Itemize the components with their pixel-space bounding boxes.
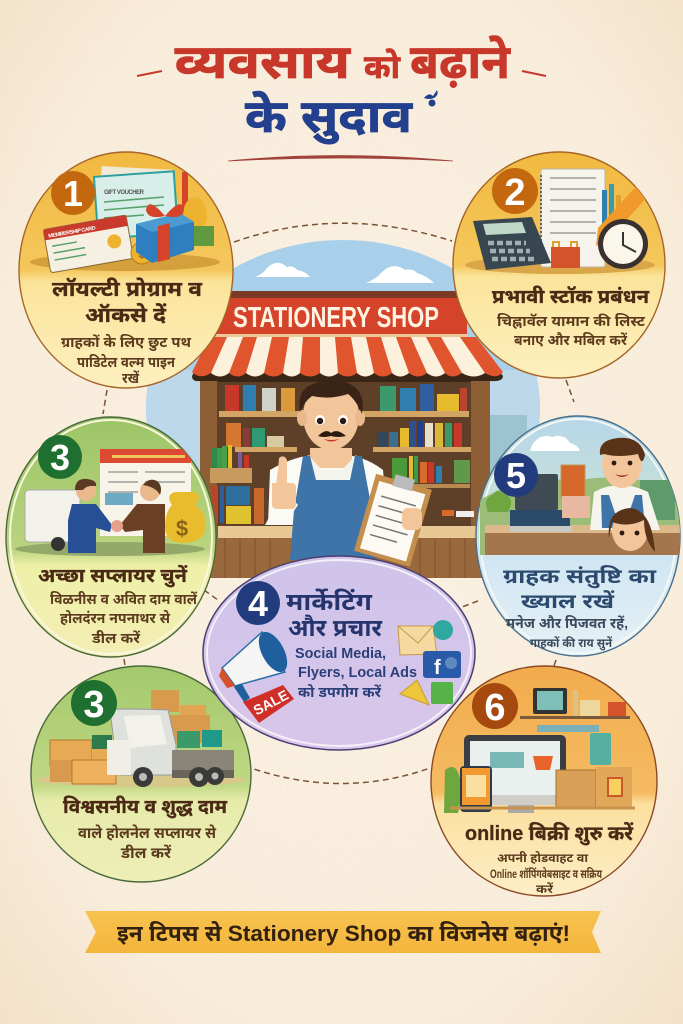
bottom banner [85,911,601,953]
heading: अच्छा सप्लायर चुनें [38,564,188,588]
heading: लॉयल्टी प्रोग्राम व [52,277,202,301]
body text: डील करें [120,844,172,862]
body text: वाले होलनेल सप्लायर से [78,824,217,842]
icon: sale tag [243,685,294,723]
shop sign [210,291,467,338]
badge 3: 3 [83,684,105,726]
counter [218,526,476,538]
illustration: voucher, card and gift: MEMBERSHIP CARD [48,225,96,240]
illustration: calculator, notebook, clock [465,169,655,274]
body text: अपनी होडवाहट वा [497,850,588,865]
heading: मार्केटिंग [286,588,373,616]
panel 3b: wholesale supplier [31,666,251,882]
awning [192,337,503,381]
badge 3: 3 [50,437,70,478]
heading: प्रभावी स्टॉक प्रबंधन [492,286,649,308]
body text [78,824,217,862]
body text [295,645,417,700]
title line 1: बढ़ाने [410,35,511,88]
illustration: delivery truck with boxes [35,690,245,787]
body text: करें [536,882,554,896]
icon: sale tag: SALE [251,687,291,718]
illustration: handshake and deal: $ [176,516,188,541]
badge 4: 4 [248,583,268,624]
badge 2 [492,168,538,214]
panel 1: loyalty [19,152,233,388]
icon: ornament [424,90,438,106]
panel 3: supplier [6,417,216,657]
body text [61,333,192,386]
heading line 2: ख्याल रखें [521,590,615,613]
body text: Online शॉपिंगवेबसाइट व सक्रिय [490,866,602,881]
body text: मनेज और पिजवत रहें, [506,614,628,631]
badge 6 [472,683,518,729]
body text: को डपगोग करें [298,684,382,700]
title [137,35,546,161]
badge 3 [38,435,82,479]
title line 2: के सुदाव [245,89,413,144]
illustration: voucher, card and gift: GIFT VOUCHER [104,190,145,196]
heading: online बिक्री शुरु करें [465,821,634,846]
illustration: handshake and deal [15,449,205,556]
badge 3 [71,680,117,726]
connectors: dashed arcs [103,223,574,784]
body text [490,850,602,896]
clipboard [354,469,433,567]
badge 4 [236,581,280,625]
title line 1: को [364,48,401,85]
badge 5: 5 [506,455,526,496]
badge 1 [51,171,95,215]
heading line 2: और प्रचार [288,614,382,642]
body text: बनाए और मबिल करें [514,332,628,348]
body text: Social Media, [295,645,386,662]
center scene: stationery shop [146,240,541,580]
body text: ग्राहकों के लिए छुट पथ [61,333,192,352]
body text [50,591,198,646]
heading line 2: ऑकसे दें [85,303,167,327]
body text: होलदंरन नपनाथर से [60,609,171,626]
sign text: STATIONERY SHOP [233,302,439,334]
badge 6: 6 [484,687,506,729]
illustration: voucher, card and gift: $ [138,246,146,261]
panel 6: online sales [431,666,657,896]
banner text: इन टिपस से Stationery Shop का विजनेस बढ़ाएं! [117,921,570,947]
icon: megaphone [219,627,293,702]
illustration: shop counter with customer [480,436,680,555]
panel 2: stock management [453,152,665,378]
badge 1: 1 [63,173,83,214]
books on shelves [210,384,474,524]
panel 4: marketing [203,556,475,750]
body text [497,313,645,348]
badge 5 [494,453,538,497]
badge 2: 2 [504,172,526,214]
icon: envelope and social icons: f [434,657,441,679]
body text: Flyers, Local Ads [298,664,417,681]
title line 1: व्यवसाय [174,35,351,88]
body text: डील करें [91,630,141,646]
body text: रखें [122,370,140,386]
body text: पाडिटेल वल्म पाइन [77,353,175,370]
illustration: voucher, card and gift [30,166,220,273]
sky backdrop [146,240,540,474]
shop structure [200,370,490,575]
face [303,382,359,450]
heading: विश्वसनीय व शुद्ध दाम [63,796,228,819]
illustration: computer, phone, parcels [444,688,635,813]
body text: विळनीस व अवित दाम वालें [50,591,198,607]
arm and thumbs-up [265,490,298,525]
shopkeeper [265,380,433,567]
icon: envelope and social icons [398,620,461,705]
panel 5: customer satisfaction [476,416,680,656]
heading: ग्राहक संतुष्टि का [503,564,657,589]
body text [506,614,628,652]
body text: गाहकों की राय सुनें [530,636,613,652]
body text: चिह्नावॅल यामान की लिस्ट [497,313,645,330]
